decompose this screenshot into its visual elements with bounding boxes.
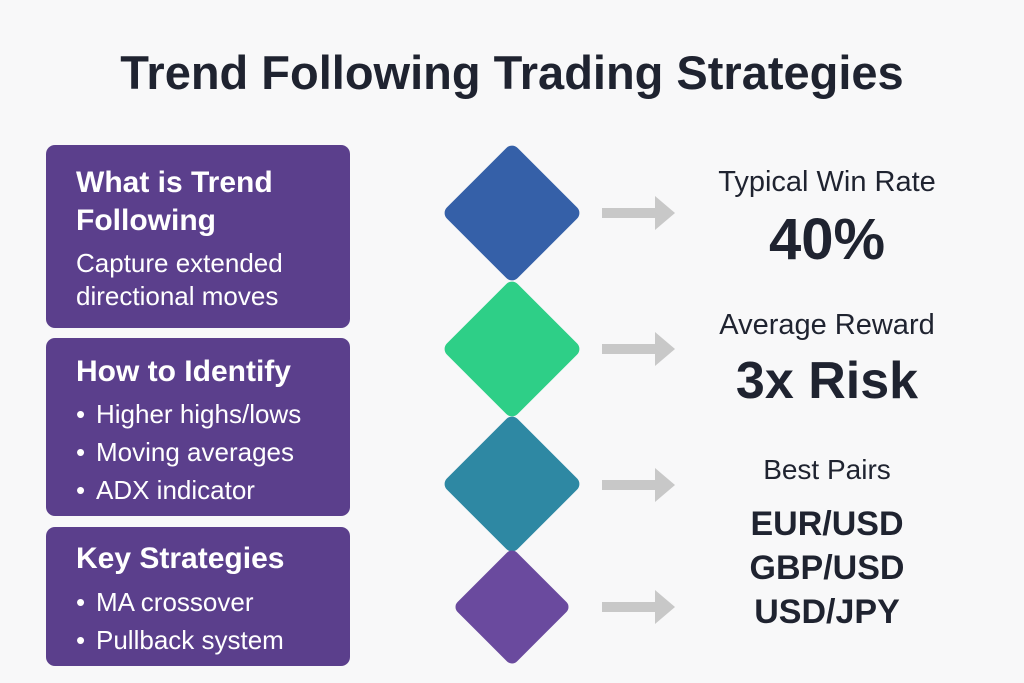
panel: how to identify: ADX indicator — [96, 475, 255, 505]
panel: what is trend following — [46, 145, 350, 328]
panel: what is trend following: Capture extended — [76, 248, 283, 278]
panel: how to identify — [46, 338, 350, 516]
panel: key strategies — [46, 527, 350, 666]
panel: how to identify: • — [76, 475, 85, 505]
title: Trend Following Trading Strategies — [120, 46, 904, 99]
text: GBP/USD — [750, 549, 904, 587]
icon: diamond teal — [441, 413, 583, 555]
stat: average reward: Average Reward — [719, 309, 935, 341]
panel: how to identify: Higher highs/lows — [96, 399, 301, 429]
stat: best pairs: Best Pairs — [763, 454, 891, 485]
panel: how to identify: • — [76, 399, 85, 429]
text: 3x Risk — [736, 352, 918, 410]
panel: key strategies: MA crossover — [96, 587, 254, 617]
panel: how to identify: • — [76, 437, 85, 467]
arrows — [602, 196, 675, 624]
panel: what is trend following: directional moves — [76, 281, 278, 311]
icon: diamond green — [441, 278, 583, 420]
panel: how to identify: Moving averages — [96, 437, 294, 467]
panel: key strategies: Pullback system — [96, 625, 284, 655]
text: EUR/USD — [750, 505, 904, 543]
stat: win rate: Typical Win Rate — [718, 166, 936, 198]
panel: how to identify: How to Identify — [76, 355, 291, 388]
icon: diamond purple — [453, 548, 571, 666]
panel: key strategies: • — [76, 625, 85, 655]
panel: what is trend following: What is Trend — [76, 166, 273, 199]
panel: key strategies: Key Strategies — [76, 542, 284, 575]
icon: diamond blue — [441, 142, 583, 284]
panel: what is trend following: Following — [76, 204, 216, 237]
text: 40% — [769, 207, 885, 272]
text: USD/JPY — [754, 593, 900, 631]
panel: key strategies: • — [76, 587, 85, 617]
